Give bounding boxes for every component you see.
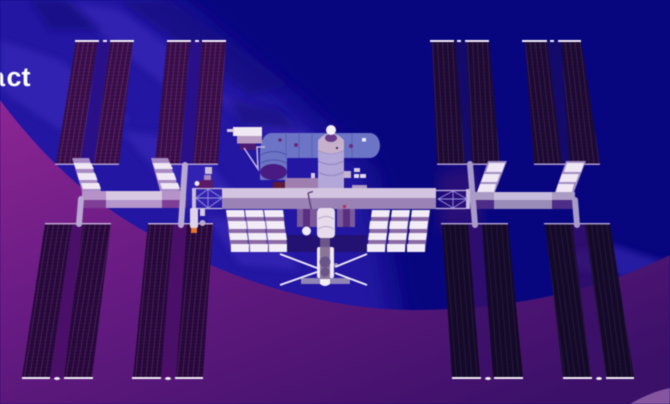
left truss segment [82, 191, 186, 208]
lower central modules [287, 208, 367, 286]
solar array: lower right outer [544, 223, 634, 380]
solar array: lower left outer [22, 223, 111, 380]
left lattice section [192, 188, 222, 209]
right lattice section [436, 189, 470, 209]
boxes beside the node [273, 168, 367, 188]
blue laboratory modules [260, 133, 380, 180]
right radiators [477, 161, 586, 192]
robotic cargo module [227, 127, 265, 169]
bottom right corner glow [630, 388, 670, 404]
purple foreground shape [0, 100, 670, 404]
solar array: upper right inner [430, 40, 500, 165]
left truss struts [79, 165, 185, 225]
central vertical node [318, 125, 344, 188]
solar array: upper left inner [154, 40, 226, 165]
left radiators [72, 158, 180, 191]
main central truss [222, 188, 436, 218]
right truss segment [472, 192, 575, 209]
soyuz solar wings [280, 254, 367, 285]
solar array: upper left outer [55, 40, 134, 165]
right truss struts [470, 164, 577, 225]
left docked modules [190, 167, 213, 233]
solar array: lower left inner [132, 223, 213, 380]
right lower radiator panels [367, 210, 430, 252]
left lower radiator panels [226, 210, 288, 252]
solar array: upper right outer [522, 40, 600, 165]
solar array: lower right inner [441, 223, 523, 380]
